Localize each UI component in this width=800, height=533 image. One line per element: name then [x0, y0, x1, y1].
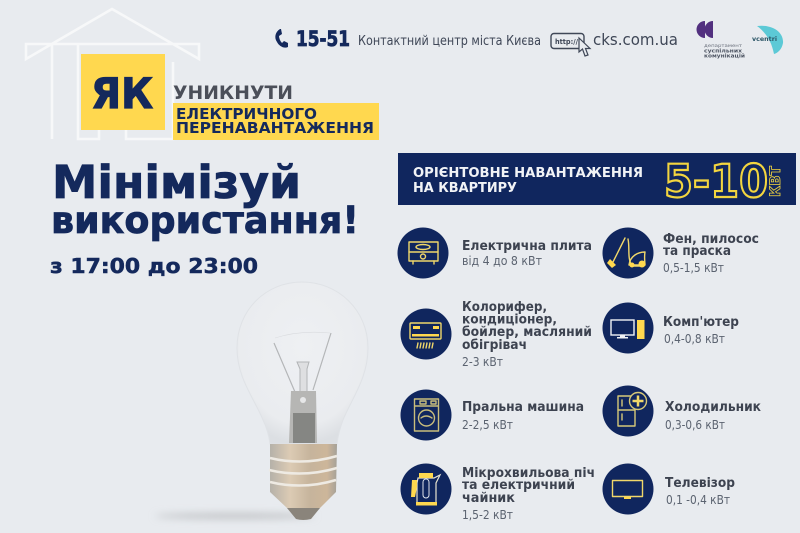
contact centre label: Контактний центр міста Києва — [358, 34, 541, 49]
icon: computer — [602, 302, 654, 354]
website address: cks.com.ua — [593, 30, 678, 49]
logo: vcentri — [752, 26, 783, 54]
logo: department of public communications: суспільних — [704, 48, 743, 54]
time range: з 17:00 до 23:00 — [50, 254, 258, 278]
item: washing machine — [400, 390, 584, 440]
heading: уникнути: УНИКНУТИ — [173, 83, 293, 104]
item: heater, air conditioner, boiler, oil radiator — [400, 300, 592, 369]
item: heater, air conditioner, boiler, oil radiator: Колорифер, — [462, 300, 547, 315]
website link — [551, 30, 678, 56]
illustration: light bulb — [155, 282, 368, 520]
icon: house outline — [26, 9, 199, 139]
website link: http:// — [555, 38, 578, 46]
item: washing machine: Пральна машина — [462, 400, 584, 415]
item: refrigerator — [602, 386, 761, 436]
icon: electric stove — [398, 228, 448, 278]
banner: estimated load per apartment — [398, 153, 796, 208]
item: computer: 0,4-0,8 кВт — [664, 332, 725, 346]
banner: estimated load per apartment: НА КВАРТИРУ — [413, 180, 517, 196]
icon: washing machine — [400, 390, 452, 440]
item: hair dryer, vacuum, iron: 0,5-1,5 кВт — [663, 261, 724, 275]
item: microwave and kettle — [400, 464, 595, 522]
icon: cursor — [579, 38, 590, 56]
item: hair dryer, vacuum, iron: та праска — [663, 244, 731, 259]
item: washing machine: 2-2,5 кВт — [462, 418, 513, 432]
item: television: 0,1 -0,4 кВт — [666, 493, 730, 507]
item: refrigerator: 0,3-0,6 кВт — [665, 418, 725, 432]
icon: phone — [275, 29, 288, 48]
item: television — [602, 464, 735, 514]
item: heater, air conditioner, boiler, oil radiator: бойлер, масляний — [462, 325, 592, 340]
logo: department of public communications: департамент — [704, 43, 743, 48]
item: computer: Комп'ютер — [663, 315, 739, 330]
item: electric stove: від 4 до 8 кВт — [462, 254, 542, 268]
logo: vcentri: vcentri — [752, 36, 777, 43]
item: heater, air conditioner, boiler, oil radiator: кондиціонер, — [462, 312, 557, 328]
item: heater, air conditioner, boiler, oil radiator: обігрівач — [462, 338, 527, 353]
headline: використання! — [51, 199, 359, 242]
item: refrigerator: Холодильник — [665, 400, 761, 415]
heading: електричного перенавантаження: ЕЛЕКТРИЧНОГО — [176, 105, 317, 123]
item: electric stove: Електрична плита — [462, 239, 592, 254]
item: hair dryer, vacuum, iron — [602, 228, 759, 278]
contact: phone — [275, 27, 350, 51]
icon: kettle — [400, 464, 452, 514]
item: microwave and kettle: 1,5-2 кВт — [462, 508, 513, 522]
banner: estimated load per apartment: ОРІЄНТОВНЕ НАВАНТАЖЕННЯ — [413, 165, 643, 181]
logo block: ЯК yellow square: ЯК — [91, 69, 153, 118]
logo: department of public communications: комунікацій — [704, 52, 746, 60]
item: microwave and kettle: чайник — [462, 491, 515, 506]
item: hair dryer, vacuum, iron: Фен, пилосос — [663, 232, 759, 247]
load value: 5-10 — [664, 155, 768, 208]
item: television: Телевізор — [665, 476, 735, 491]
icon: vacuum cleaner — [602, 228, 654, 278]
phone number: 15-51 — [296, 27, 350, 51]
icon: television — [602, 464, 654, 514]
logo block: ЯК yellow square — [81, 54, 165, 130]
headline: Мінімізуй — [52, 156, 301, 209]
heading: електричного перенавантаження — [173, 103, 379, 140]
item: electric stove — [398, 228, 592, 278]
icon: air conditioner — [400, 308, 452, 360]
headline — [51, 156, 359, 242]
item: heater, air conditioner, boiler, oil radiator: 2-3 кВт — [462, 355, 503, 369]
item: microwave and kettle: Мікрохвильова піч — [462, 466, 595, 481]
heading: електричного перенавантаження: ПЕРЕНАВАНТАЖЕННЯ — [176, 119, 374, 137]
icon: browser address bar — [551, 34, 584, 48]
icon: refrigerator — [602, 386, 654, 436]
item: computer — [602, 302, 739, 354]
item: microwave and kettle: та електричний — [462, 478, 575, 493]
unit: КВТ — [768, 166, 784, 197]
logo: department of public communications — [696, 21, 746, 60]
